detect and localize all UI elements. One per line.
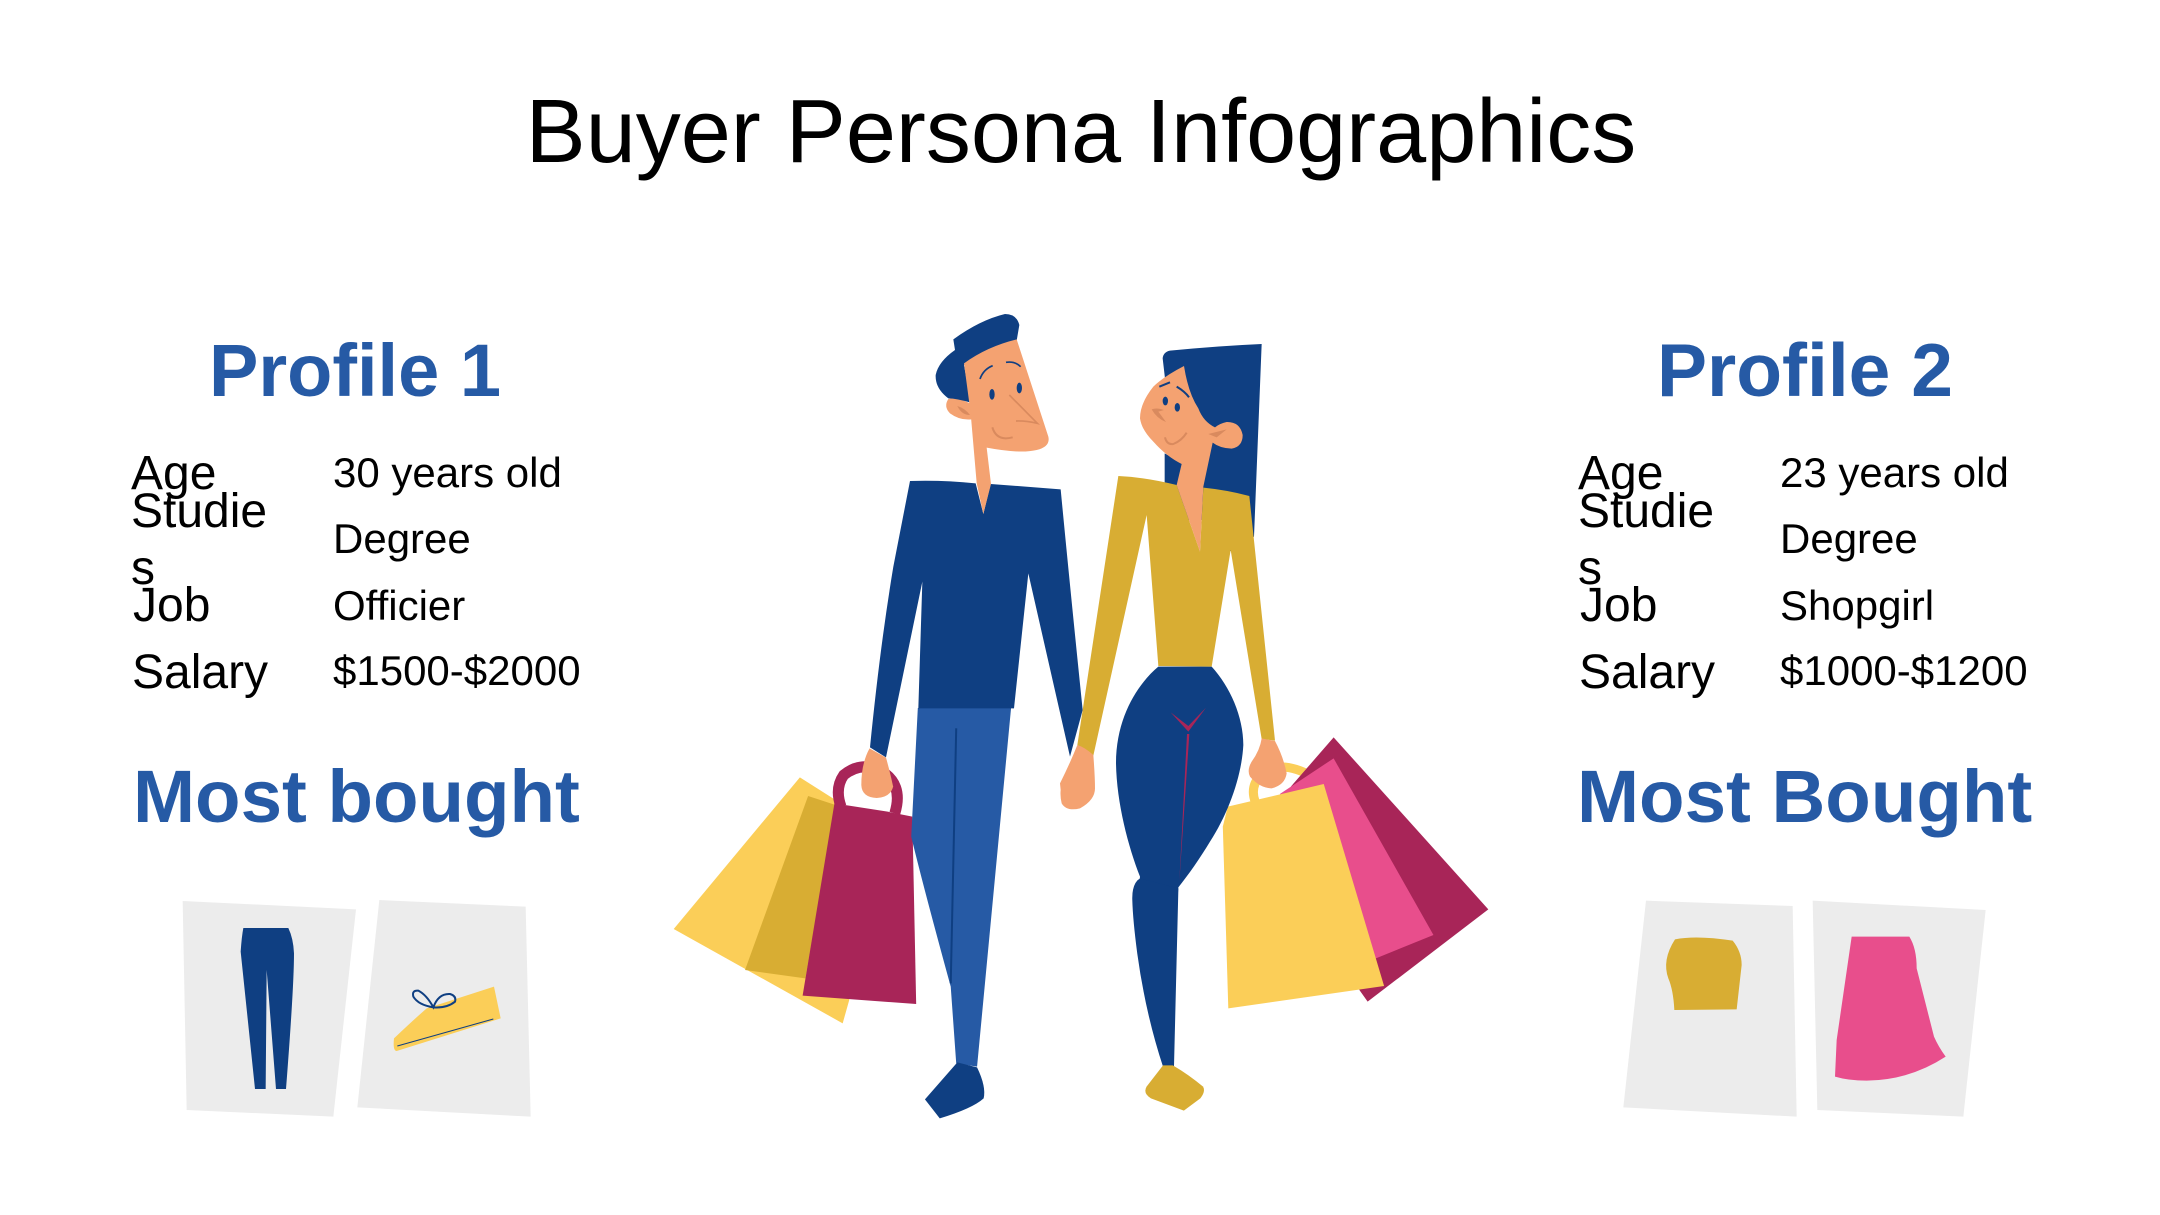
right shopping bags bbox=[1223, 737, 1488, 1008]
text block: profile 1 values bbox=[333, 449, 581, 694]
woman head bbox=[1140, 366, 1243, 552]
heading: most bought 2: Most Bought bbox=[1577, 755, 2032, 838]
text block: profile 1 labels: Age bbox=[131, 447, 216, 500]
heading: most bought: Most bought bbox=[133, 755, 580, 838]
text block: profile 1 values: $1500-$2000 bbox=[333, 647, 581, 694]
heading: profile 2: Profile 2 bbox=[1657, 328, 1953, 412]
text block: profile 2 values: Shopgirl bbox=[1780, 582, 1934, 629]
text block: profile 1 values: Degree bbox=[333, 515, 471, 562]
panel: profile 1 bbox=[131, 329, 581, 838]
woman hair back bbox=[1163, 344, 1262, 552]
man trousers and shoe bbox=[911, 708, 1011, 1118]
left shopping bags bbox=[674, 767, 916, 1023]
panel: profile 2 bbox=[1577, 328, 2032, 838]
text block: profile 2 values bbox=[1780, 449, 2028, 694]
text block: profile 2 labels: Studie bbox=[1578, 485, 1714, 538]
text block: profile 1 values: Officier bbox=[333, 582, 465, 629]
text block: profile 1 labels: Job bbox=[133, 579, 210, 632]
text block: profile 1 labels bbox=[131, 447, 268, 699]
woman shoe bbox=[1145, 1065, 1204, 1111]
text block: profile 1 labels: Studie bbox=[131, 485, 267, 538]
text block: profile 2 labels: s bbox=[1578, 542, 1602, 595]
icon: skirt card bbox=[1813, 901, 1986, 1117]
text block: profile 1 labels: s bbox=[131, 542, 155, 595]
heading: profile 1: Profile 1 bbox=[209, 329, 501, 412]
text block: profile 2 values: Degree bbox=[1780, 515, 1918, 562]
title: Buyer Persona Infographics bbox=[526, 82, 1636, 182]
woman sweater bbox=[1077, 476, 1275, 756]
text block: profile 1 labels: Salary bbox=[132, 646, 268, 699]
text block: profile 1 values: 30 years old bbox=[333, 449, 562, 496]
man head bbox=[936, 314, 1049, 514]
man bbox=[870, 314, 1083, 1118]
man sweater bbox=[870, 481, 1083, 757]
hands bbox=[861, 738, 1287, 809]
icon: shoe card bbox=[357, 900, 531, 1117]
text block: profile 2 values: 23 years old bbox=[1780, 449, 2009, 496]
text block: profile 2 labels: Age bbox=[1578, 447, 1663, 500]
text block: profile 2 labels: Salary bbox=[1579, 646, 1715, 699]
text block: profile 2 labels bbox=[1578, 447, 1715, 699]
woman bbox=[1077, 344, 1275, 1111]
illustration: couple with shopping bags bbox=[674, 314, 1488, 1118]
text block: profile 2 labels: Job bbox=[1580, 579, 1657, 632]
icon: trousers card bbox=[183, 901, 356, 1117]
text block: profile 2 values: $1000-$1200 bbox=[1780, 647, 2028, 694]
icon: top card bbox=[1623, 901, 1797, 1117]
woman legs bbox=[1116, 667, 1243, 1067]
